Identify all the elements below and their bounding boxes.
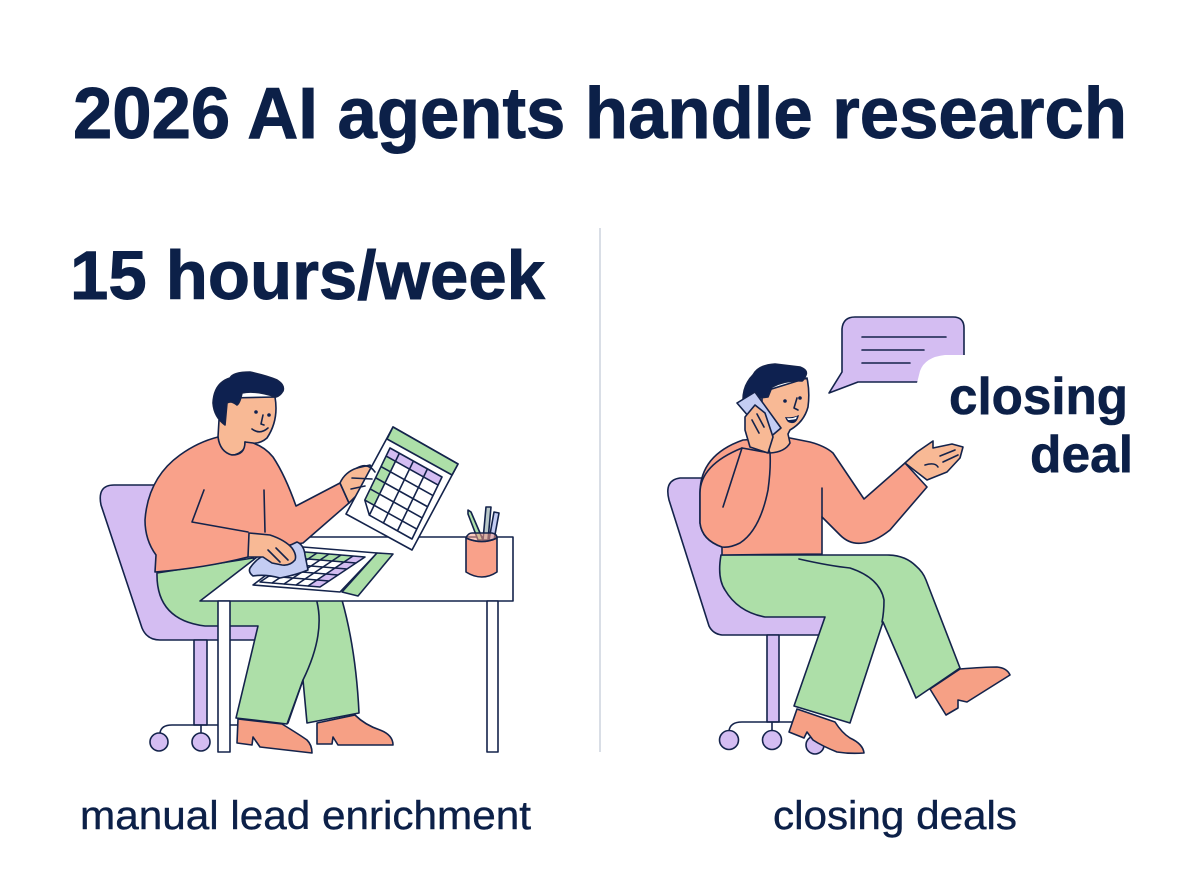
caption: manual lead enrichment: manual lead enrichment: [80, 794, 531, 838]
hand holding phone: [745, 405, 773, 453]
closing deal label: deal: [1030, 426, 1133, 484]
chair: [668, 478, 825, 754]
sweater: [145, 437, 349, 572]
sweater: [700, 438, 927, 555]
head: [743, 364, 809, 453]
title: 2026 AI agents handle research: [73, 74, 1127, 154]
speech bubble: [829, 317, 970, 400]
stat: 15 hours/week: 15 hours/week: [70, 237, 546, 314]
panel: closing deals illustration: [668, 317, 1133, 754]
finger: [351, 466, 375, 489]
shoes: [789, 667, 1010, 753]
shoes: [237, 715, 393, 753]
desk: [200, 537, 513, 752]
caption: closing deals: closing deals: [773, 794, 1017, 838]
trousers: [157, 558, 359, 724]
hand holding sheet: [340, 465, 377, 503]
chair: [100, 485, 258, 751]
phone: [737, 392, 781, 439]
hand on cloth: [248, 533, 296, 565]
panel: manual research illustration: [100, 372, 513, 753]
head: [213, 372, 283, 455]
spreadsheet: [346, 427, 458, 550]
cloth: [249, 542, 308, 578]
desk paper: [253, 547, 393, 596]
pen cup: [466, 507, 499, 577]
closing deal label: closing: [949, 368, 1128, 426]
closing deal label: [949, 368, 1133, 484]
raised hand: [905, 441, 963, 480]
trousers: [720, 555, 960, 723]
